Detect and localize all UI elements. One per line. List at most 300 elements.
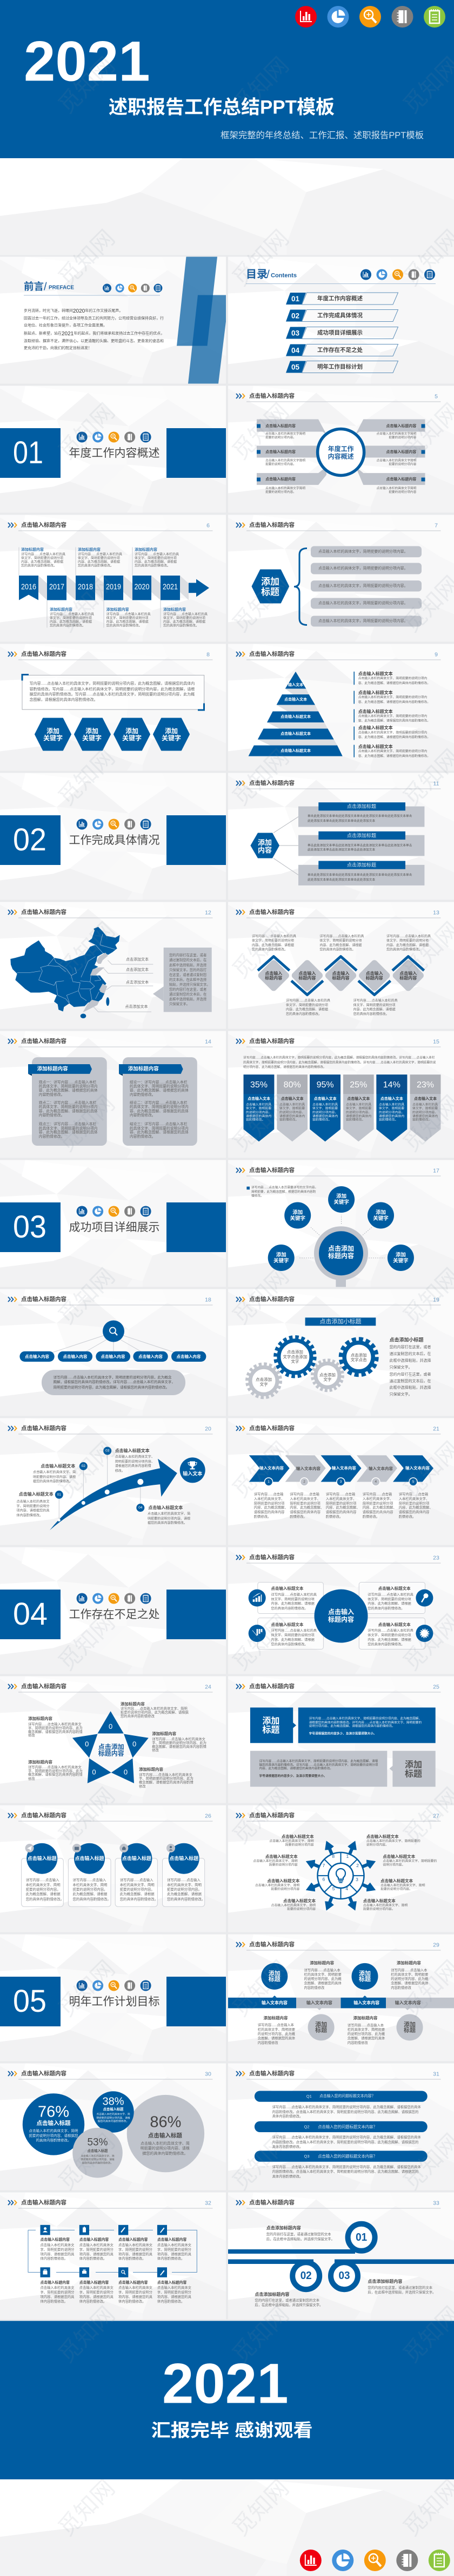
side text 4: 容、此为概念图解、请根据您的具体内容酌情修改。	[358, 735, 430, 739]
circle titles: 点击输入标题	[169, 1855, 198, 1861]
left labels: 点击输入标题内容	[265, 423, 296, 428]
left labels: 点击输入标题文本	[283, 1898, 316, 1903]
top texts: 体文字、简明扼要的说明分项	[386, 938, 429, 943]
map labels: 点击添加文本	[125, 1004, 148, 1009]
section title: 成功项目详细展示	[69, 1221, 160, 1234]
step texts: 简明扼要的说明分项	[363, 1500, 393, 1505]
text group 1: 的说明分项内容、此为概	[304, 1976, 342, 1980]
left labels: 扼要的说明分项内容。	[265, 462, 296, 466]
question 2: 点击输入您的问题标题文本内容？	[318, 2124, 377, 2129]
panel: slide 21 chevron process	[228, 1418, 454, 1545]
bottom row texts: 字、简明扼要的说明分	[118, 2289, 153, 2294]
watermarks: 觅知网	[228, 745, 293, 810]
step texts: 请根据您的具体内容	[363, 1509, 393, 1514]
text 02: 您的内容打在这里，或者通过复制您的文本	[255, 2297, 320, 2302]
bubble 38%: 据您的具体内容酌情修改。	[98, 2119, 129, 2123]
section title: 明年工作计划目标	[69, 1996, 160, 2008]
icon row	[77, 432, 151, 443]
bullet text	[246, 1185, 318, 1198]
side text 4: 点击输入本栏的具体文字、简明扼要的说明分项内	[358, 730, 427, 734]
left labels: 点击输入本栏的具体文字、简明	[271, 1903, 316, 1907]
side text 3: 点击输入本栏的具体文字、简明扼要的说明分项内	[358, 714, 427, 718]
text above timeline 3: 详写内容......点击输入本栏的具	[135, 552, 179, 556]
top row texts: 项内容、请根据您的具	[40, 2251, 75, 2256]
step texts: 入本栏的具体文字、	[290, 1496, 321, 1501]
gear: gray left	[247, 1364, 281, 1397]
gear: gray middle: 文字	[323, 1376, 331, 1382]
text group 1: 详写内容......点击输入本	[304, 1967, 340, 1972]
page number: 15	[433, 1039, 439, 1045]
right labels: 点击输入标题文本	[383, 1854, 416, 1859]
watermarks: 觅知网	[228, 571, 293, 637]
pill labels: 点击输入内容	[176, 1354, 201, 1359]
column 25%: 点击输入本栏的具	[346, 1103, 371, 1107]
watermarks: 觅知网	[228, 1956, 293, 2021]
column 95%: 的说明分项内容。	[312, 1110, 338, 1114]
top texts	[252, 934, 431, 951]
panel: slide 30 percentage bubbles	[0, 2064, 226, 2190]
icon row: closing	[300, 2550, 450, 2571]
right labels: 点击输入标题文本	[366, 1834, 399, 1839]
column 23%: 23%	[417, 1080, 434, 1090]
text above timeline 1: 详写内容......点击输入本栏的具	[21, 552, 65, 556]
outlined cards	[22, 1858, 205, 1906]
right text: 此框中选择粘贴，并选择	[389, 1358, 431, 1363]
pyramid labels: 点击输入标题文本	[281, 731, 311, 736]
card text right top: 内容、此为概念图解、请根据	[368, 1601, 411, 1606]
top row texts: 点击输入本栏的具体文	[157, 2242, 192, 2247]
watermarks: 觅知网	[228, 398, 293, 464]
gray callout: 的文本后，在此框中选择	[169, 977, 207, 982]
question 1: 具体内容酌情修改。	[272, 2113, 303, 2118]
circle labels: 添加	[404, 2020, 416, 2028]
icon row	[77, 1593, 151, 1604]
left labels	[265, 423, 305, 494]
pill labels	[25, 1354, 201, 1359]
page number: 26	[205, 1813, 211, 1820]
keyword labels: 添加	[376, 1209, 386, 1215]
top row texts: 体内容酌情修改。	[40, 2256, 68, 2261]
text below timeline 1: 您的具体内容酌情修改。	[50, 623, 85, 627]
text 02: 据您的具体内容酌情修改。	[33, 1479, 72, 1483]
gear: gray middle: 点击添加	[319, 1371, 336, 1377]
gear: blue large	[275, 1337, 315, 1376]
diamond labels: 点击输入	[298, 970, 316, 976]
gray callout: 只保留文字。您的内容打	[169, 967, 207, 972]
text group 1: 念图解、请根据您的具体	[304, 1980, 342, 1985]
text group 4: 的说明分项内容、此为概	[348, 2031, 385, 2036]
blue chevrons	[258, 957, 424, 995]
column 25%: 请根据您的具体内	[346, 1114, 371, 1118]
panel: slide 15 percentage columns	[228, 1031, 454, 1158]
column 95%: 请根据您的具体内	[312, 1114, 338, 1118]
watermarks: 觅知网	[54, 2129, 119, 2195]
step texts: 简明扼要的说明分项	[399, 1500, 430, 1505]
text group 2	[391, 1960, 429, 1990]
right text: 您的内容打在这里，或者	[389, 1344, 431, 1349]
closing message: 汇报完毕 感谢观看	[151, 2420, 313, 2440]
left labels: 点击输入本栏的具体文字、简明	[255, 1883, 300, 1888]
bottom row texts: 项内容、请根据您的具	[40, 2294, 75, 2299]
step texts: 请根据您的具体内容	[254, 1509, 285, 1514]
connectors	[273, 817, 298, 875]
card texts: 详写内容......点击输入	[167, 1877, 201, 1882]
panel: slide 31 Q and A	[228, 2064, 454, 2190]
bubble 86%: 据您的具体内容酌情修改。	[142, 2151, 188, 2155]
keyword labels: 添加	[276, 1252, 286, 1258]
heading: 点击输入标题内容	[21, 2199, 66, 2206]
page number: 20	[205, 1425, 211, 1432]
bottom texts: 体文字、简明扼要的说明分项	[286, 1003, 328, 1007]
text above timeline 3: 添加标题内容	[135, 547, 157, 552]
gear: blue large: 点击添加	[287, 1349, 303, 1354]
section number: 02	[13, 822, 46, 857]
number 02	[79, 1462, 88, 1470]
top row squares	[40, 2225, 167, 2235]
list pills	[311, 546, 422, 626]
text below timeline 3: 您的具体内容酌情修改。	[163, 623, 199, 627]
column 80%: 的说明分项内容。	[279, 1110, 305, 1114]
card: conclusions: 结论二：详写内容......点击输入本栏	[130, 1100, 188, 1105]
diamond labels: 点击输入	[399, 970, 417, 976]
circle titles: 点击输入标题	[75, 1855, 104, 1861]
contents item 02: 02	[291, 311, 299, 320]
step texts: 酌情修改。	[399, 1514, 416, 1519]
text 01	[266, 2225, 335, 2241]
bottom row texts: 体内容酌情修改。	[118, 2298, 145, 2303]
right text: 只保留文字。	[389, 1391, 412, 1396]
question 2	[255, 2121, 428, 2148]
blue markers	[257, 424, 425, 482]
card: viewpoints: 观点一：详写内容......点击输入本栏	[39, 1079, 96, 1084]
right labels: 扼要的说明分项内容	[389, 435, 417, 440]
hexagon	[250, 833, 279, 858]
blue parallelograms	[177, 257, 226, 383]
keyword labels: 添加	[396, 1252, 406, 1258]
blue title box: 添加	[262, 1716, 279, 1726]
pyramid labels: 点击输入文本	[284, 697, 307, 702]
bubble 53%: 点击输入本栏的具体文字、简	[81, 2154, 115, 2158]
column 95%: 95%	[317, 1080, 334, 1090]
band	[228, 1996, 454, 2010]
bottom row texts: 项内容、请根据您的具	[79, 2294, 114, 2299]
card texts: 您的具体内容酌情修改。	[120, 1896, 158, 1901]
stems	[59, 1451, 141, 1520]
box 1	[298, 802, 424, 827]
ring 02: 02	[301, 2270, 312, 2282]
contents item 04: 工作存在不足之处	[317, 347, 363, 353]
keyword labels: 添加	[125, 727, 138, 735]
panel: slide 27 wheel	[228, 1806, 454, 1932]
gray title box	[389, 1751, 436, 1787]
section number: 03	[13, 1209, 46, 1245]
text below timeline 1: 体文字、简明扼要的说明分项	[50, 616, 92, 620]
gray note: 简明扼要的说明分项内容，此为概念图解，请根据您的具体内容酌情修改。	[54, 1384, 169, 1389]
gray note: 图解，请根据您的具体内容酌情修改。详写内容......点击输入本栏的具体文字，	[54, 1379, 175, 1384]
card: conclusions: 容、此为概念图解、请根据您的具体	[130, 1087, 189, 1092]
text 04	[148, 1505, 190, 1525]
year blocks	[19, 576, 180, 600]
text group 2: 添加标题内容	[397, 1960, 421, 1965]
year labels: 2017	[49, 583, 64, 592]
text group 3: 念图解、请根据您的具体	[258, 2035, 296, 2040]
wheel numbers: 3	[356, 1877, 358, 1882]
text 03: 您的内容打在这里，或者通过复制您的文本	[368, 2285, 433, 2290]
watermarks: 觅知网	[54, 1091, 119, 1157]
top row texts: 点击输入标题内容	[157, 2237, 186, 2242]
box 3: 点击添加标题	[347, 862, 376, 868]
card: viewpoints	[28, 1057, 107, 1146]
right labels: 点击输入标题内容	[386, 423, 416, 428]
subtitle bar	[305, 1317, 376, 1326]
column 80%	[277, 1074, 308, 1141]
right text: 您的内容打在这里，或者	[389, 1371, 431, 1376]
gear: blue large: 文字点击添加	[283, 1354, 307, 1359]
bottom texts: 您的具体内容酌情修改。	[286, 1012, 322, 1016]
swoosh arrow	[50, 1459, 177, 1530]
circle labels: 标题	[359, 1975, 371, 1983]
panel: section 01	[0, 386, 226, 513]
column 35%	[243, 1074, 274, 1141]
column 23%: 请根据您的具体内	[412, 1114, 438, 1118]
card texts: 您的具体内容酌情修改。	[72, 1896, 111, 1901]
text 04: 点击输入标题文本	[148, 1505, 183, 1510]
text 03: 点击添加标题内容	[368, 2278, 402, 2284]
contents item 03	[286, 327, 398, 339]
bubble 86%: 86%	[150, 2113, 181, 2131]
heading: 点击输入标题内容	[249, 2199, 295, 2206]
dashed arrows	[298, 1215, 384, 1258]
right labels: 点击输入本栏的具体文字、简明	[380, 1883, 425, 1888]
bottom texts	[286, 998, 398, 1016]
panel: preface: 更充沛的干劲，向我们的既定目标进发！	[24, 345, 92, 350]
contents heading: Contents	[271, 272, 297, 279]
text below timeline 2	[106, 607, 151, 627]
text below timeline 1: 添加标题内容	[50, 607, 72, 612]
gray callout: 只保留文字。	[169, 1001, 190, 1006]
icon row: cover	[295, 6, 445, 28]
gray note	[42, 1370, 185, 1395]
ring 02	[292, 2262, 319, 2289]
text below timeline 2: 内容、此为概念图解、请根据	[106, 620, 149, 624]
column 80%: 点击输入文本	[281, 1096, 304, 1101]
watermarks: 觅知网	[228, 52, 293, 118]
question 3: 详写内容......点击输入本栏的具体文字、简明扼要的说明分项内容、此为概念图解、请根据您的具体	[272, 2164, 421, 2169]
step texts: 简明扼要的说明分项	[254, 1500, 285, 1505]
text 01: 后，在此框中选择粘贴，并选择只保留文字。	[266, 2236, 335, 2241]
gray bars	[257, 419, 425, 485]
bubble 76%: 点击输入本栏的具体文字、简明	[29, 2128, 78, 2133]
keyword labels: 关键字	[82, 734, 102, 742]
text left lower: 概念图解、请根据您的具体内容酌情	[28, 1772, 83, 1776]
top row texts: 点击输入本栏的具体文	[79, 2242, 114, 2247]
text below timeline 1: 内容、此为概念图解、请根据	[50, 620, 92, 624]
text right lower: 添加标题内容	[139, 1767, 163, 1772]
text 02: 点击添加标题内容	[255, 2291, 289, 2297]
gear: blue large: 文字	[291, 1358, 299, 1364]
text top: 添加标题内容	[121, 1701, 145, 1706]
step texts: 简明扼要的说明分项	[290, 1500, 321, 1505]
text top	[121, 1701, 189, 1718]
panel: slide 11 hexagon to boxes	[228, 773, 454, 900]
watermarks: 觅知网	[54, 2475, 119, 2541]
text right upper	[152, 1731, 207, 1752]
contents heading: 目录	[246, 268, 268, 281]
card text right bottom: 您的具体内容酌情修改。	[368, 1642, 404, 1646]
icon: key	[416, 1590, 433, 1607]
card: conclusions: 内容酌情修改。	[130, 1134, 156, 1138]
column 14%: 的说明分项内容。	[379, 1110, 404, 1114]
column 80%: 容酌情修改。	[279, 1118, 298, 1122]
intro paragraph: 详写内容......点击输入本栏的具体文字，简明扼要的说明分项内容，此为概念图解，请根据您的具体内容酌情修改。详写内容......点击输入本栏	[243, 1055, 435, 1059]
text group 2: 栏的具体文字、简明扼要	[391, 1972, 428, 1976]
gray callout: 在这里，或者通过复制您	[169, 972, 206, 977]
side text 5: 容、此为概念图解、请根据您的具体内容酌情修改。	[358, 754, 430, 758]
bubble 86%	[127, 2095, 204, 2172]
heading: 点击输入标题内容	[249, 1554, 295, 1560]
text right upper: 添加标题内容	[152, 1731, 177, 1736]
text below timeline 2: 详写内容......点击输入本栏的具	[106, 612, 151, 617]
column 14%: 14%	[383, 1080, 400, 1090]
watermarks: 觅知网	[54, 398, 119, 464]
text 04: 据您的具体内容酌情修改。	[148, 1520, 187, 1525]
card: conclusions: 容、此为概念图解、请根据您的具体	[130, 1108, 189, 1113]
gray callout: 此框中选择粘贴，并选择	[169, 962, 207, 967]
box 1: 单击此处添加文本单击此处添加文本单击此处添加文本单击此处添加文本单击	[308, 814, 412, 818]
right labels	[363, 1834, 437, 1911]
heading: 点击输入标题内容	[249, 522, 295, 528]
contents item 03: 03	[291, 328, 299, 337]
side text 1: 点击输入标题文本	[358, 671, 393, 676]
text group 2: 详写内容......点击输入本	[391, 1967, 428, 1972]
side text 5: 点击输入标题文本	[358, 744, 393, 749]
side text 2: 点击输入本栏的具体文字、简明扼要的说明分项内	[358, 695, 427, 699]
text right lower: 详写内容......点击输入本栏的具体文	[139, 1772, 192, 1777]
keyword labels: 关键字	[122, 734, 142, 742]
text below timeline 2: 您的具体内容酌情修改。	[106, 623, 142, 627]
closing year: 2021	[162, 2352, 289, 2416]
top row texts: 体内容酌情修改。	[79, 2256, 106, 2261]
watermarks: 觅知网	[54, 1263, 119, 1329]
watermarks: 觅知网	[228, 1783, 293, 1849]
step texts: 酌情修改。	[254, 1514, 271, 1519]
magnifier center: 点击添加	[328, 1244, 354, 1253]
contents item 01: 年度工作内容概述	[317, 295, 363, 302]
text above timeline 1: 内容、此为概念图解、请根据	[21, 559, 63, 564]
column 23%	[410, 1074, 440, 1141]
bubble 38%: 38%	[102, 2096, 124, 2108]
gray callout	[153, 948, 212, 1012]
gear: gray left: 文字	[259, 1381, 268, 1387]
text 03	[368, 2278, 436, 2294]
heading: 点击输入标题内容	[249, 908, 295, 916]
number 04	[136, 1504, 144, 1512]
gray callout: 通过复制您的文本后，在	[169, 991, 206, 996]
bubble 53%: 点击输入标题	[88, 2148, 108, 2153]
dot numbers: 3	[340, 1480, 342, 1484]
page number: 32	[205, 2200, 211, 2206]
text group 1: 栏的具体文字、简明扼要	[304, 1972, 342, 1976]
card text right top: 体文字、简明扼要的说明分项	[368, 1597, 411, 1601]
bottom row texts: 点击输入标题内容	[157, 2280, 186, 2284]
section title: 工作存在不足之处	[69, 1608, 160, 1621]
keyword labels: 添加	[292, 1209, 303, 1215]
gray text box: 字号请根据您的内容多少、及演示需要调整大小。	[259, 1774, 327, 1778]
text right upper: 详写内容......点击输入本栏的具体文	[152, 1736, 206, 1741]
card text right top: 您的具体内容酌情修改。	[368, 1606, 404, 1610]
keyword labels	[273, 1193, 409, 1263]
bubble 76%: 点击输入标题	[37, 2120, 71, 2126]
column 14%: 请根据您的具体内	[379, 1114, 404, 1118]
text right upper: 字、简明扼要的说明分项内容、此为	[152, 1740, 206, 1745]
circle labels	[269, 1970, 416, 2033]
bubble 53%: 据您的具体内容酌情修改。	[82, 2161, 113, 2165]
column 14%: 点击输入文本	[380, 1096, 403, 1101]
step texts: 入本栏的具体文字、	[399, 1496, 429, 1501]
text group 1: 添加标题内容	[310, 1960, 335, 1965]
year labels: 2019	[106, 583, 121, 592]
circle labels: 添加	[269, 1970, 281, 1977]
card text right bottom	[368, 1622, 413, 1646]
pill labels: 点击输入内容	[138, 1354, 163, 1359]
top row texts: 字、简明扼要的说明分	[157, 2247, 192, 2252]
band: 输入文本内容	[306, 2000, 332, 2005]
watermarks: 觅知网	[54, 571, 119, 637]
list pills: 点击输入本栏的具体文字，简明扼要的说明分项内容。	[318, 549, 408, 553]
column 80%: 点击输入本栏的具	[279, 1103, 305, 1107]
map labels: 点击添加文本	[126, 979, 149, 985]
left labels: 点击输入标题内容	[265, 449, 296, 454]
column 25%: 体文字、简明扼要	[346, 1106, 371, 1110]
text 03	[115, 1448, 155, 1472]
text above timeline 2: 添加标题内容	[78, 547, 101, 552]
column 35%: 容酌情修改。	[246, 1118, 265, 1122]
text left upper: 详写内容......点击输入本栏的具体文	[28, 1721, 82, 1726]
top row texts: 体内容酌情修改。	[118, 2256, 145, 2261]
column 14%: 容酌情修改。	[379, 1118, 398, 1122]
cover title: 述职报告工作总结PPT模板	[109, 97, 335, 118]
text left lower: 添加标题内容	[28, 1759, 52, 1764]
number 03	[103, 1447, 111, 1455]
card text left top: 点击输入标题文本	[271, 1586, 304, 1591]
keyword circles	[268, 1186, 414, 1271]
top texts: 内容、此为概念图解、请根据	[252, 943, 294, 947]
watermarks: 觅知网	[54, 2302, 119, 2368]
bottom row texts: 字、简明扼要的说明分	[40, 2289, 75, 2294]
column 35%: 请根据您的具体内	[246, 1114, 271, 1118]
step texts: 入本栏的具体文字、	[254, 1496, 284, 1501]
center circle: 标题内容	[328, 1615, 354, 1623]
text group 3: 栏的具体文字、简明扼要	[258, 2026, 295, 2031]
right labels: 点击输入本栏的具体文字、简明扼要的	[383, 1859, 437, 1863]
question 1: 内容酌情修改。点击输入本栏的具体文字、简明扼要的说明分项内容、此为概念图解、请根据您的	[272, 2109, 418, 2114]
card text left bottom: 详写内容......点击输入本栏的具	[271, 1628, 317, 1633]
flow lines	[28, 2230, 197, 2272]
chevron labels: 输入文本内容	[332, 1465, 356, 1471]
column 23%: 容酌情修改。	[412, 1118, 431, 1122]
panel: slide 14 two cards	[0, 1031, 226, 1158]
bubble 53%	[72, 2128, 123, 2178]
panel: slide 19 gears	[228, 1289, 454, 1416]
text left upper: 字、简明扼要的说明分项内容、此为	[28, 1725, 83, 1730]
watermarks: 觅知网	[228, 2475, 293, 2541]
text left upper	[28, 1716, 83, 1737]
star numbers: 0	[132, 1740, 136, 1748]
framed text box: 写内容......点击输入本栏的具体文字，简明扼要的说明分项内容，此为概念图解，请根据您的具体内	[30, 680, 195, 686]
keyword labels: 添加	[85, 727, 98, 735]
question 3: 点击输入您的问题标题文本内容？	[318, 2154, 377, 2159]
step texts: 内容、此为概念图解、	[326, 1505, 360, 1510]
